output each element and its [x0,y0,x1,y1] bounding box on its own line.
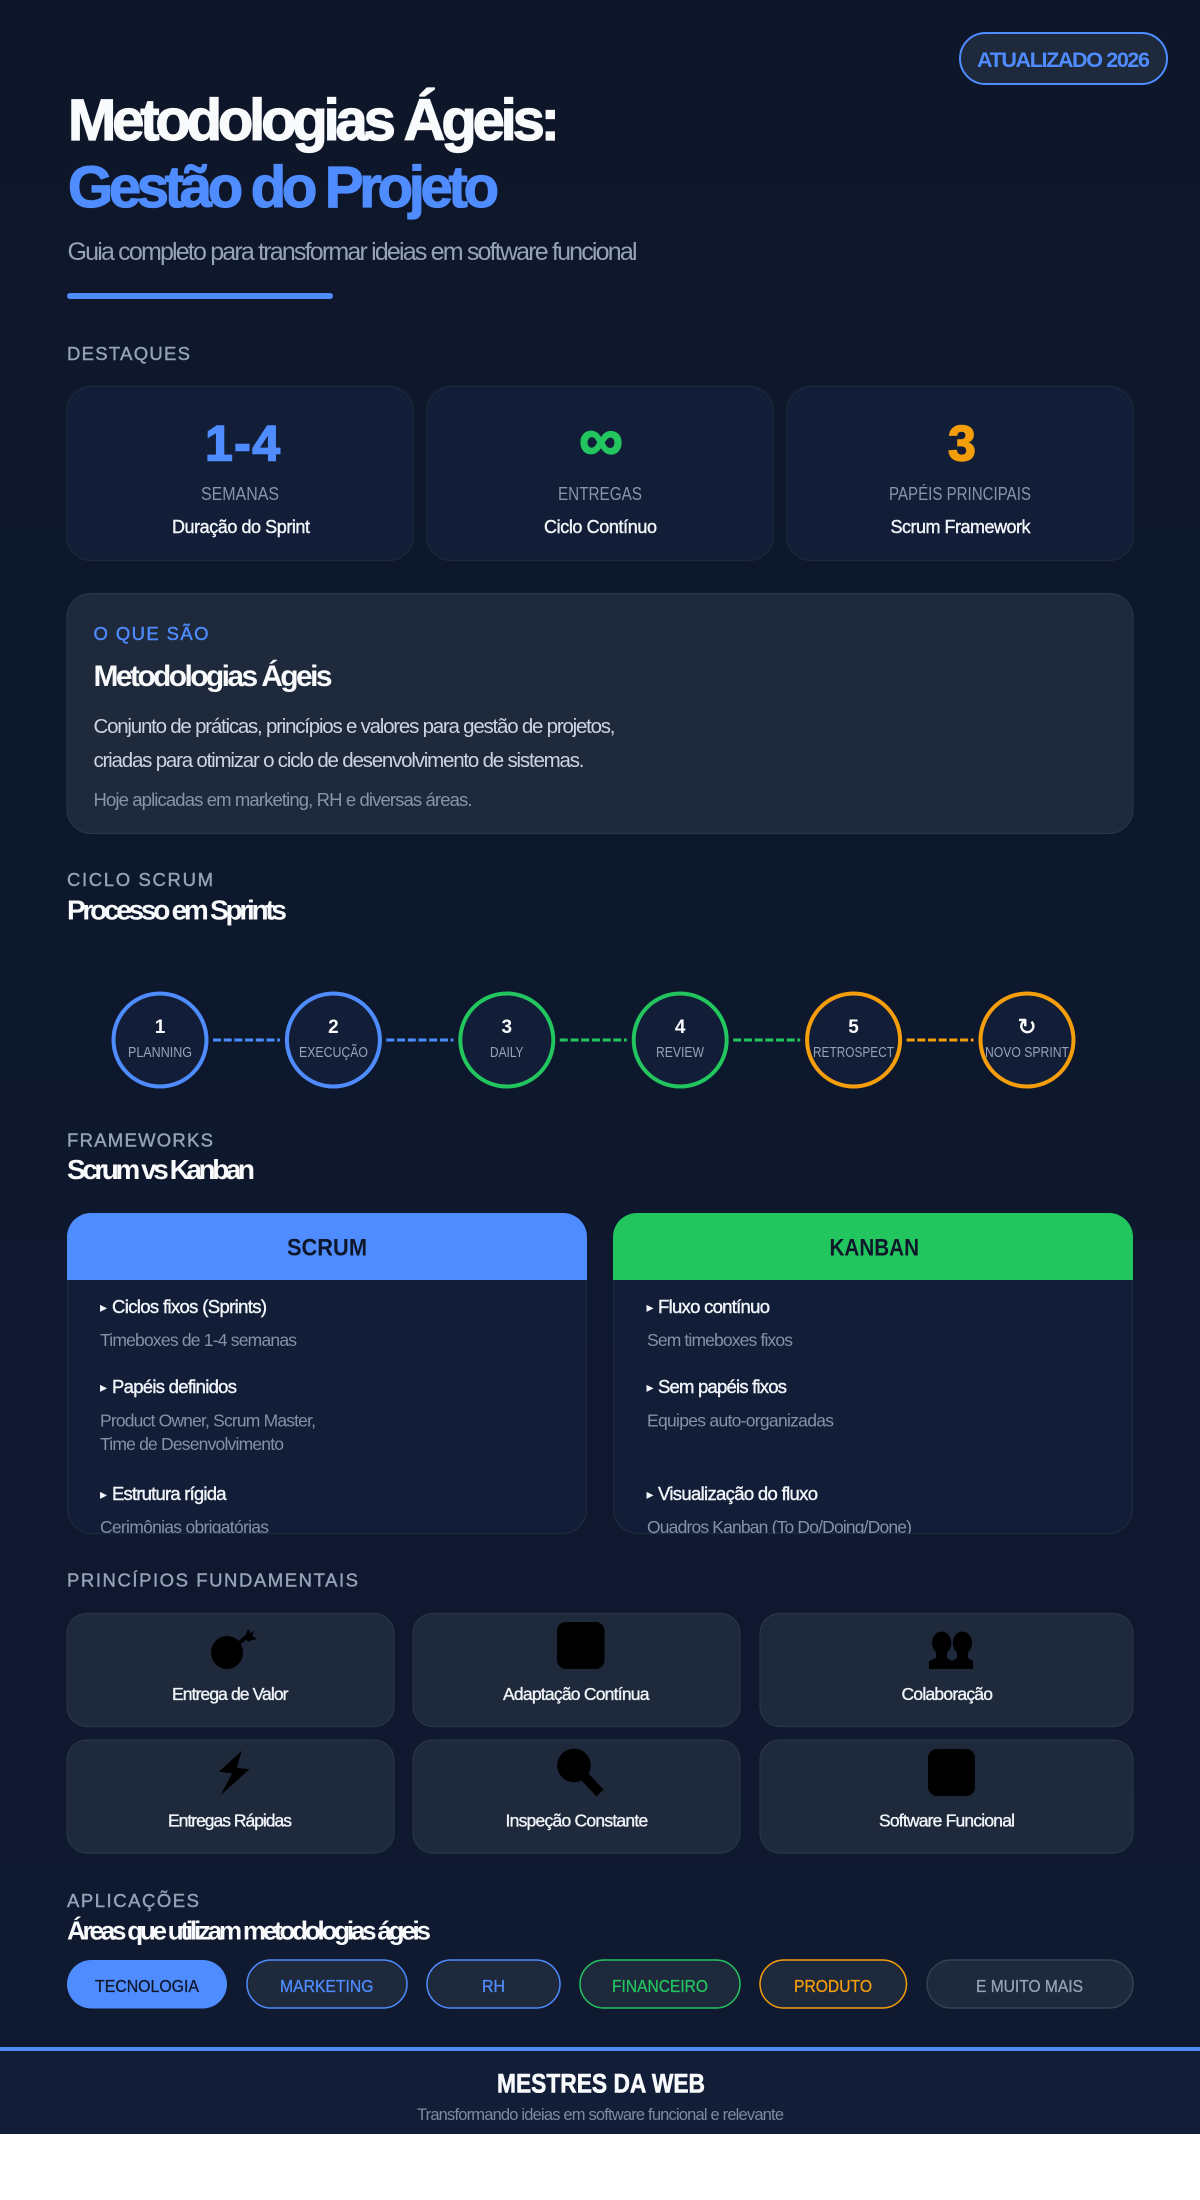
panel: scrum [67,1213,587,1537]
title line 2: Gestão do Projeto [68,155,499,220]
item: sem papeis fixos [646,1376,834,1430]
stat card: entregas: ENTREGAS [558,484,642,504]
panel: kanban: KANBAN [830,1234,919,1262]
footer tagline: Transformando ideias em software funcional e relevante [417,2106,784,2124]
connector 2 [386,1038,453,1042]
pill: tecnologia: TECNOLOGIA [95,1976,199,1996]
step 5: RETROSPECT [813,1045,894,1061]
pill: financeiro [580,1960,740,2008]
description [94,715,616,772]
pill: financeiro: FINANCEIRO [612,1976,708,1996]
connector 4 [733,1038,800,1042]
stat card: sprint: 1-4 [205,416,280,472]
section: aplicacoes [67,1890,1133,2008]
step 4 [634,994,727,1086]
subtitle: Guia completo para transformar ideias em software funcional [68,238,638,266]
section heading: frameworks: FRAMEWORKS [67,1130,213,1150]
item: sem papeis fixos: Sem papéis fixos [658,1376,787,1397]
pill: produto: PRODUTO [794,1976,872,1996]
section heading: ciclo scrum: Processo em Sprints [67,894,287,926]
icon: missing glyph box [928,1749,975,1796]
connector 3 [560,1038,627,1042]
stat card: papeis: PAPÉIS PRINCIPAIS [889,484,1031,504]
card: entregas rapidas [67,1740,394,1853]
item: ciclos fixos [100,1299,296,1346]
item: papeis definidos [100,1376,316,1454]
card: entrega de valor: Entrega de Valor [172,1684,289,1704]
pill: marketing [247,1960,407,2008]
step 6: novo sprint [980,994,1074,1086]
footer brand: MESTRES DA WEB [497,2068,705,2098]
footer [0,2047,1200,2134]
card: inspecao constante: Inspeção Constante [506,1811,648,1831]
item: estrutura rigida: ▸ [100,1487,107,1503]
item: fluxo continuo: Sem timeboxes fixos [647,1330,793,1350]
item: fluxo continuo: Fluxo contínuo [658,1296,770,1317]
description: criadas para otimizar o ciclo de desenvolvimento de sistemas. [94,749,584,772]
panel: scrum: SCRUM [287,1234,367,1262]
step 2 [287,994,380,1086]
item: papeis definidos: Product Owner, Scrum Master, [100,1410,316,1430]
card: software funcional [760,1740,1133,1853]
heading: principios: PRINCÍPIOS FUNDAMENTAIS [67,1570,358,1590]
pill: e muito mais [927,1960,1133,2008]
step 2: 2 [328,1017,339,1038]
card: inspecao constante [413,1740,740,1853]
pill: tecnologia [67,1960,227,2008]
item: ciclos fixos: ▸ [100,1300,107,1316]
kanban header [613,1213,1133,1280]
stat card: papeis [787,386,1133,560]
item: sem papeis fixos: ▸ [646,1380,654,1396]
section heading: ciclo scrum [67,869,287,926]
process flow: scrum cycle [114,994,1074,1086]
item: papeis definidos: Papéis definidos [112,1376,237,1397]
section heading: ciclo scrum: CICLO SCRUM [67,869,213,890]
item: visualizacao do fluxo: Visualização do fluxo [658,1483,818,1504]
item: sem papeis fixos: Equipes auto-organizadas [647,1410,834,1430]
header: title block [67,88,638,299]
icon: people [929,1632,973,1669]
pill: rh [427,1960,560,2008]
step 5: 5 [848,1017,859,1038]
stat card: sprint: Duração do Sprint [172,517,310,537]
icon: magnifier [557,1749,600,1793]
heading: destaques: DESTAQUES [67,343,190,364]
stat card: entregas: Ciclo Contínuo [544,517,657,537]
step 2: EXECUÇÃO [299,1044,368,1061]
step 1: PLANNING [128,1045,192,1061]
section: destaques [67,343,1133,560]
item: fluxo continuo [646,1299,792,1346]
pill: produto [760,1960,906,2008]
panel: o que sao [67,594,1133,834]
icon: dart [211,1629,257,1669]
section heading: frameworks [67,1130,255,1185]
card: adaptacao continua: Adaptação Contínua [503,1684,650,1704]
pill: marketing: MARKETING [280,1976,374,1996]
step 4: REVIEW [656,1045,704,1061]
badge: atualizado 2026: ATUALIZADO 2026 [977,48,1150,72]
item: papeis definidos: ▸ [100,1380,107,1396]
step 5 [807,994,900,1086]
step 4: 4 [675,1017,686,1038]
section: principios fundamentais [67,1570,1133,1853]
item: estrutura rigida: Cerimônias obrigatórias [100,1517,269,1537]
description: Conjunto de práticas, princípios e valores para gestão de projetos, [94,715,616,738]
stat card: sprint: SEMANAS [201,484,279,504]
step 6: novo sprint: ↻ [1017,1014,1037,1040]
step 3: 3 [502,1017,512,1038]
accent bar [67,293,333,299]
scrum header [67,1213,587,1280]
item: visualizacao do fluxo [646,1486,911,1534]
step 1: 1 [155,1017,166,1038]
card: adaptacao continua [413,1614,740,1726]
card: colaboracao [760,1614,1133,1726]
step 3 [460,994,553,1086]
stat card: papeis: Scrum Framework [890,517,1032,537]
connector 5 [907,1038,974,1042]
kicker: O QUE SÃO [94,623,208,644]
item: visualizacao do fluxo: ▸ [646,1487,654,1503]
title line 1: Metodologias Ágeis: [68,88,560,153]
card: colaboracao: Colaboração [902,1684,993,1704]
panel: kanban [613,1213,1133,1537]
note: Hoje aplicadas em marketing, RH e diversas áreas. [94,789,472,810]
pill: e muito mais: E MUITO MAIS [976,1976,1083,1996]
section heading: frameworks: Scrum vs Kanban [67,1154,255,1185]
item: ciclos fixos: Timeboxes de 1-4 semanas [100,1330,297,1350]
stat card: entregas [427,386,773,560]
connector 1 [213,1038,280,1042]
item: ciclos fixos: Ciclos fixos (Sprints) [112,1296,267,1317]
panel heading: Metodologias Ágeis [94,659,332,693]
card: software funcional: Software Funcional [879,1811,1015,1831]
icon: missing glyph box [557,1622,604,1669]
step 1 [114,994,206,1086]
item: papeis definidos: Time de Desenvolvimento [100,1434,284,1454]
heading: aplicacoes: APLICAÇÕES [67,1890,199,1911]
icon: lightning bolt [219,1751,249,1795]
badge: atualizado 2026 [960,33,1167,84]
item: visualizacao do fluxo: Quadros Kanban (To Do/Doing/Done) [647,1517,912,1537]
card: entregas rapidas: Entregas Rápidas [168,1811,292,1831]
subheading: Áreas que utilizam metodologias ágeis [67,1916,431,1946]
item: fluxo continuo: ▸ [646,1300,654,1316]
stat card: sprint [67,386,413,560]
step 6: novo sprint: NOVO SPRINT [985,1045,1069,1061]
stat card: papeis: 3 [948,416,976,472]
stat card: entregas: ∞ [579,406,623,474]
pill: rh: RH [482,1976,505,1996]
item: estrutura rigida: Estrutura rígida [112,1483,227,1504]
card: entrega de valor [67,1614,394,1726]
item: estrutura rigida [100,1486,268,1534]
step 3: DAILY [490,1045,524,1061]
